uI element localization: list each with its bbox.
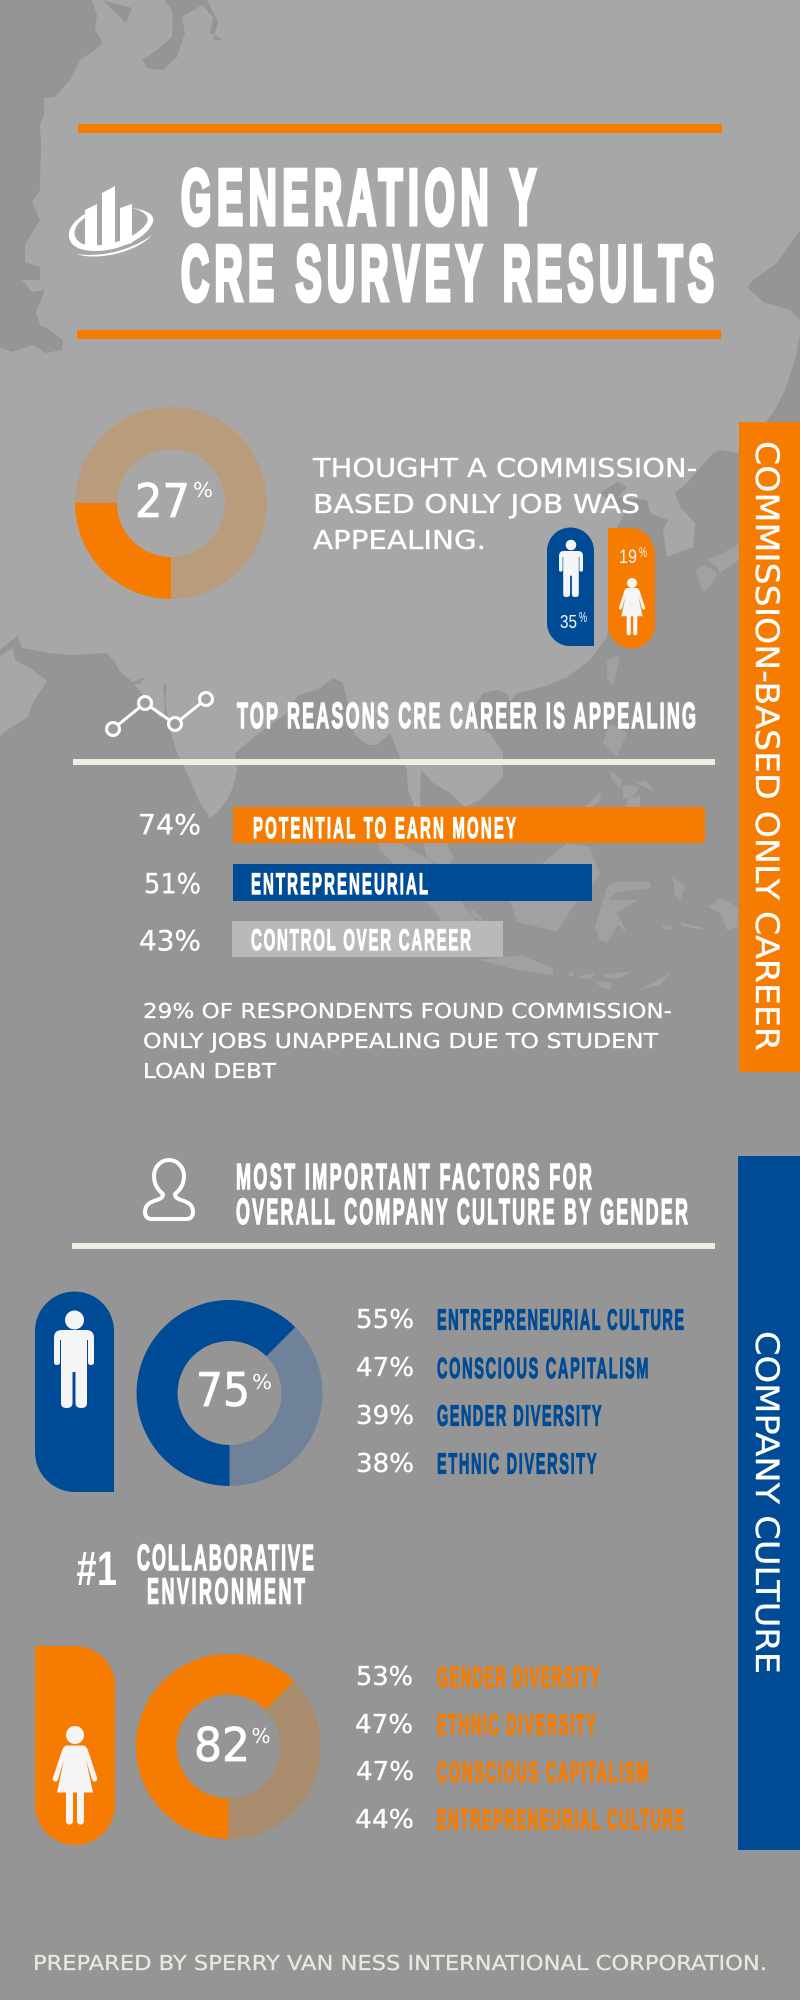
large female pill [35, 1646, 115, 1845]
large male pill [35, 1292, 114, 1492]
donut chart: 75 percent male [137, 1300, 302, 1486]
bar: potential to earn money [138, 807, 705, 846]
small male pill: 35 percent [547, 528, 594, 646]
text: commission job appeal: APPEALING. [313, 526, 486, 556]
female factor list [355, 1660, 684, 1836]
bar: control over career: 43% [139, 924, 201, 957]
bar chart: top reasons [138, 807, 705, 958]
donut chart: 27 percent [75, 428, 246, 599]
text: student loan debt note: 29% OF RESPONDENTS FOUND COMMISSION- [143, 999, 672, 1023]
male factor list: GENDER DIVERSITY [437, 1399, 602, 1432]
donut chart: 75 percent male: 75 [196, 1363, 250, 1417]
bar: potential to earn money: 74% [138, 808, 201, 841]
female factor list: GENDER DIVERSITY [437, 1660, 600, 1693]
female factor list: ENTREPRENEURIAL CULTURE [437, 1803, 684, 1836]
male factor list: 38% [356, 1449, 414, 1479]
donut chart: 82 percent female: 82 [194, 1718, 250, 1772]
female factor list: 44% [355, 1805, 414, 1835]
male factor list: 47% [356, 1353, 414, 1383]
footer credit: PREPARED BY SPERRY VAN NESS INTERNATIONAL CORPORATION. [33, 1951, 767, 1975]
callout: number one collaborative environment: #1 [76, 1542, 117, 1595]
text: commission job appeal: THOUGHT A COMMISSION- [312, 454, 697, 484]
callout: number one collaborative environment: ENVIRONMENT [147, 1572, 305, 1612]
heading: most important factors: MOST IMPORTANT FACTORS FOR [236, 1157, 592, 1198]
donut chart: 27 percent: % [193, 478, 213, 502]
bottom orange rule [77, 330, 721, 339]
callout: number one collaborative environment: COLLABORATIVE [137, 1538, 314, 1579]
small male pill: 35 percent: % [579, 609, 587, 626]
title: CRE SURVEY RESULTS [181, 230, 714, 318]
donut chart: 27 percent: 27 [135, 474, 190, 528]
small female pill: 19 percent: 19 [619, 547, 637, 568]
icon: person outline [145, 1160, 193, 1219]
female factor list: CONSCIOUS CAPITALISM [437, 1755, 648, 1788]
male factor list: CONSCIOUS CAPITALISM [437, 1351, 648, 1384]
divider rule [72, 1243, 715, 1249]
donut chart: 82 percent female: % [252, 1724, 270, 1748]
top orange rule [78, 124, 722, 133]
male factor list: ENTREPRENEURIAL CULTURE [437, 1303, 684, 1336]
bar: potential to earn money: POTENTIAL TO EARN MONEY [253, 813, 516, 846]
male factor list: 39% [356, 1401, 414, 1431]
female factor list: 47% [356, 1757, 414, 1787]
icon: line chart [106, 692, 212, 736]
bar: entrepreneurial [144, 864, 592, 902]
side tab: commission-based only career: COMMISSION-BASED ONLY CAREER [748, 441, 786, 1051]
bar: control over career: CONTROL OVER CAREER [251, 925, 471, 958]
title [181, 154, 714, 318]
bar: entrepreneurial: 51% [144, 867, 201, 900]
side tab: company culture [738, 1156, 800, 1850]
icon: company logo [69, 186, 153, 257]
side tab: commission-based only career [739, 422, 800, 1072]
heading: most important factors [236, 1157, 688, 1233]
text: student loan debt note [143, 999, 672, 1083]
bar: entrepreneurial: ENTREPRENEURIAL [251, 869, 428, 902]
text: commission job appeal [312, 454, 697, 556]
small female pill: 19 percent: % [639, 544, 647, 561]
male factor list: ETHNIC DIVERSITY [437, 1447, 596, 1480]
heading: top reasons: TOP REASONS CRE CAREER IS APPEALING [237, 696, 696, 737]
small female pill: 19 percent [608, 528, 655, 648]
male factor list [356, 1303, 684, 1480]
female factor list: 47% [355, 1710, 413, 1740]
text: student loan debt note: LOAN DEBT [143, 1059, 277, 1083]
text: commission job appeal: BASED ONLY JOB WAS [313, 490, 640, 520]
divider rule [73, 759, 715, 765]
donut chart: 82 percent female [136, 1654, 301, 1839]
title: GENERATION Y [181, 154, 536, 242]
side tab: company culture: COMPANY CULTURE [748, 1331, 786, 1674]
donut chart: 75 percent male: % [252, 1370, 272, 1394]
male factor list: 55% [356, 1305, 414, 1335]
heading: most important factors: OVERALL COMPANY CULTURE BY GENDER [236, 1192, 688, 1233]
callout: number one collaborative environment [76, 1538, 314, 1612]
female factor list: ETHNIC DIVERSITY [437, 1708, 596, 1741]
bar: control over career [139, 921, 503, 958]
small male pill: 35 percent: 35 [560, 612, 577, 632]
text: student loan debt note: ONLY JOBS UNAPPEALING DUE TO STUDENT [143, 1029, 659, 1053]
female factor list: 53% [356, 1662, 413, 1692]
